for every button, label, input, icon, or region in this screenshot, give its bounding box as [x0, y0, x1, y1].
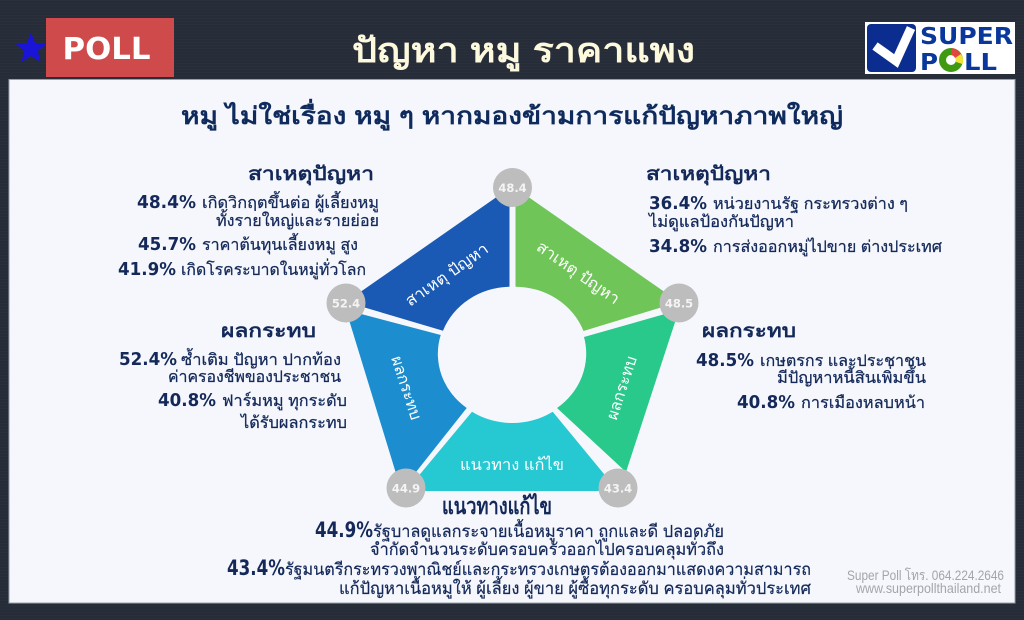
value: 52.4: [326, 284, 366, 322]
text block: left impact: ค่าครองชีพของประชาชน: [168, 368, 341, 386]
text block: left causes: 45.7%: [138, 234, 196, 255]
title: ปัญหา หมู ราคาแพง: [352, 32, 695, 72]
text block: left impact: 40.8%: [158, 390, 216, 411]
segment: solutions cyan: แนวทาง แก้ไข: [460, 455, 564, 474]
text block: right impact: มีปัญหาหนี้สินเพิ่มขึ้น: [777, 366, 926, 387]
text block: solutions: รัฐมนตรีกระทรวงพาณิชย์และกระทรวงเกษตรต้องออกมาแสดงความสามารถ: [285, 560, 811, 580]
value: 48.4: [493, 168, 532, 207]
value: 44.9: [386, 468, 426, 508]
text block: left impact: ผลกระทบ: [221, 321, 316, 342]
text block: left causes: เกิดโรคระบาดในหมู่ทั่วโลก: [181, 258, 366, 280]
text block: left causes: 41.9%: [118, 259, 176, 280]
footer contact: www.superpollthailand.net: [855, 580, 1001, 596]
segment: causes green: [516, 188, 679, 331]
segment: impact emerald: [557, 310, 679, 472]
text block: left impact: ได้รับผลกระทบ: [239, 413, 347, 432]
text block: right causes: การส่งออกหมู่ไปขาย ต่างประเทศ: [713, 237, 942, 257]
footer contact: [847, 567, 1004, 596]
text block: solutions: 44.9%: [315, 518, 373, 542]
segment: impact blue: [346, 310, 467, 480]
text block: right impact: การเมืองหลบหน้า: [801, 394, 925, 412]
text block: right impact: 40.8%: [737, 392, 795, 413]
segment: causes green: สาเหตุ ปัญหา: [533, 239, 622, 309]
segment: impact blue: ผลกระทบ: [387, 354, 424, 422]
text block: right impact: ผลกระทบ: [702, 321, 796, 342]
value: 43.4: 43.4: [604, 482, 632, 496]
text block: right impact: 48.5%: [696, 350, 754, 371]
poll badge: [46, 18, 174, 77]
value: 43.4: [598, 468, 638, 508]
text block: right causes: 36.4%: [649, 193, 707, 214]
subtitle: หมู ไม่ใช่เรื่อง หมู ๆ หากมองข้ามการแก้ปัญหาภาพใหญ่: [181, 98, 843, 131]
text block: right impact: เกษตรกร และประชาชน: [760, 353, 926, 370]
value: 44.9: 44.9: [392, 482, 420, 496]
value: 52.4: 52.4: [332, 296, 360, 310]
text block: solutions: [227, 492, 811, 599]
text block: right causes: ไม่ดูแลป้องกันปัญหา: [647, 212, 794, 232]
text block: right impact: [696, 321, 926, 413]
text block: left impact: ซ้ำเติม ปัญหา ปากท้อง: [181, 348, 341, 369]
text block: left impact: 52.4%: [119, 349, 177, 370]
text block: solutions: แก้ปัญหาเนื้อหมูให้ ผู้เลี้ยง ผู้ขาย ผู้ซื้อทุกระดับ ครอบคลุมทั่วประเทศ: [339, 576, 811, 599]
text block: left causes: ราคาต้นทุนเลี้ยงหมู สูง: [202, 233, 358, 255]
text block: left causes: เกิดวิกฤตขึ้นต่อ ผู้เลี้ยงหมู: [202, 191, 379, 213]
logo: Super Poll: P: [920, 50, 938, 76]
text block: left impact: ฟาร์มหมู ทุกระดับ: [222, 391, 347, 411]
text block: solutions: 43.4%: [227, 556, 285, 580]
text block: left causes: [118, 164, 379, 280]
text block: left causes: ทั้งรายใหญ่และรายย่อย: [216, 209, 379, 230]
pentagon chart: [326, 168, 698, 508]
text block: left causes: สาเหตุปัญหา: [248, 164, 374, 186]
text block: right causes: สาเหตุปัญหา: [646, 164, 771, 186]
logo: Super Poll: SUPER: [920, 24, 1013, 50]
value: 48.5: [660, 284, 698, 322]
logo: Super Poll: [865, 22, 1015, 76]
text block: right causes: 34.8%: [649, 236, 707, 257]
text block: right causes: [646, 164, 942, 257]
icon: blue star: [16, 32, 46, 62]
value: 48.4: 48.4: [498, 181, 527, 195]
segment: solutions cyan: [406, 412, 618, 491]
segment: causes dark blue: [346, 188, 510, 331]
text block: solutions: รัฐบาลดูแลกระจายเนื้อหมูราคา ถูกและดี ปลอดภัย: [373, 519, 724, 542]
text block: solutions: จำกัดจำนวนระดับครอบครัวออกไปครอบคลุมทั่วถึง: [370, 537, 724, 560]
segment: causes dark blue: สาเหตุ ปัญหา: [403, 241, 492, 311]
text block: right causes: หน่วยงานรัฐ กระทรวงต่าง ๆ: [713, 196, 908, 213]
logo: Super Poll: LL: [964, 50, 997, 76]
text block: solutions: แนวทางแก้ไข: [442, 492, 552, 519]
segment: impact emerald: ผลกระทบ: [604, 354, 641, 422]
text block: left causes: 48.4%: [137, 192, 196, 213]
text block: left impact: [119, 321, 347, 432]
poll badge: POLL: [62, 32, 150, 67]
value: 48.5: 48.5: [665, 296, 693, 310]
